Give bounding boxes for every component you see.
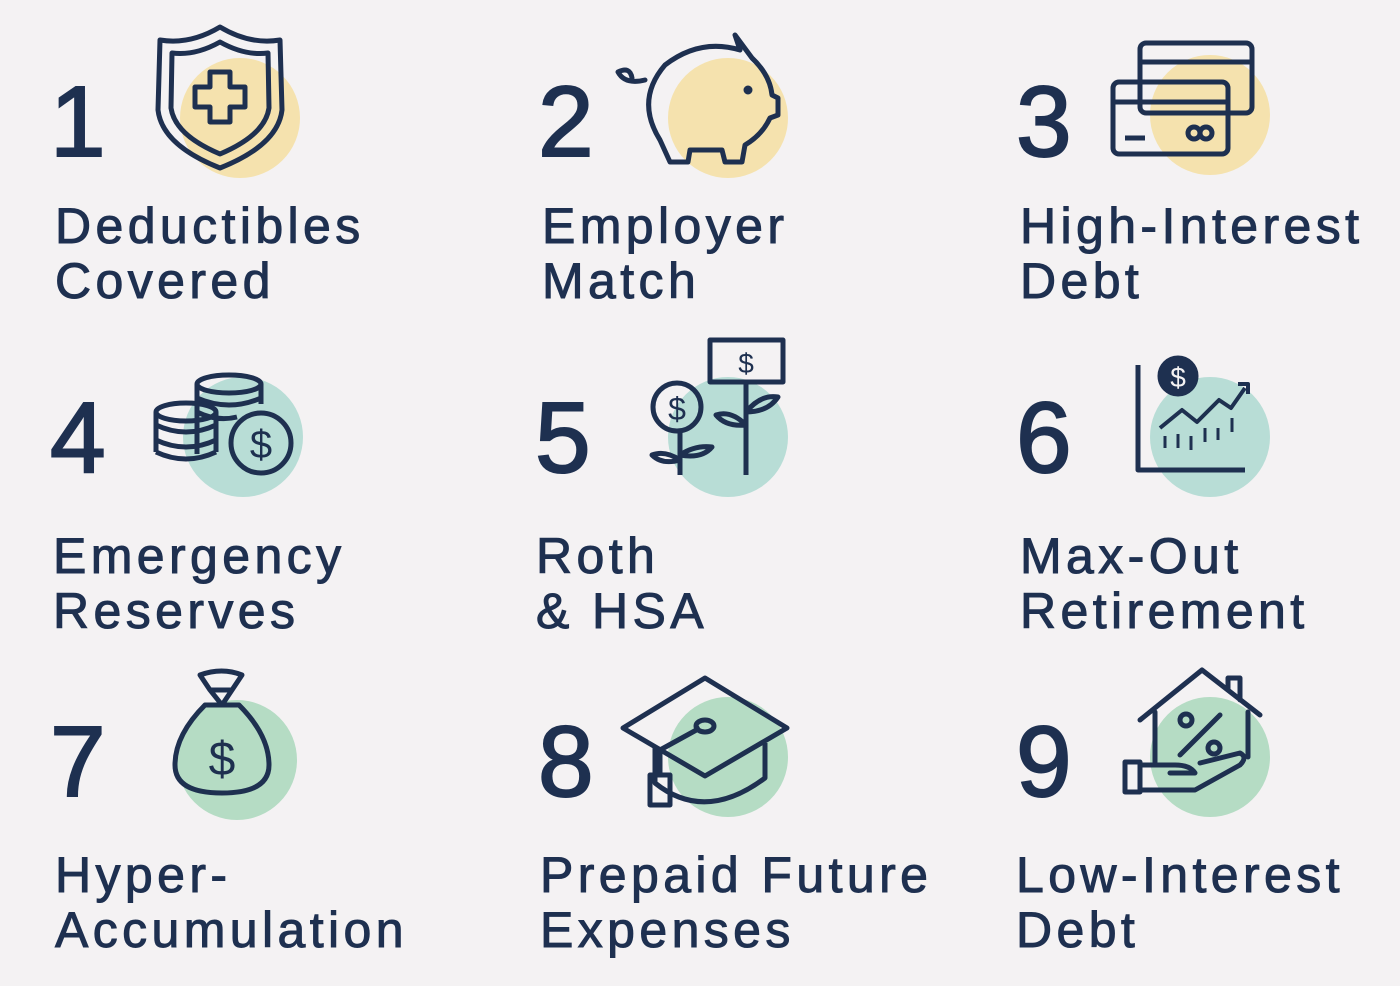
- text: $: [738, 348, 754, 379]
- icon: money plant: [650, 338, 788, 497]
- label: High-Interest Debt: High-Interest: [1020, 198, 1363, 254]
- icon: money bag: [172, 668, 297, 820]
- label: Max-Out Retirement: Max-Out: [1020, 528, 1242, 584]
- label: Employer Match: Employer: [542, 198, 788, 254]
- tile 4 number: 4: [50, 382, 106, 494]
- tile 8 number: 8: [538, 706, 594, 818]
- tile 1 number: 1: [50, 66, 106, 178]
- label: Max-Out Retirement: Retirement: [1020, 583, 1309, 639]
- label: Prepaid Future Expenses: Expenses: [540, 902, 795, 958]
- tile 2 number: 2: [538, 66, 594, 178]
- icon: piggy bank: [616, 32, 788, 178]
- label: Deductibles Covered: Deductibles: [55, 198, 365, 254]
- label: Deductibles Covered: [55, 198, 365, 309]
- label: Roth & HSA: [536, 528, 708, 639]
- label: Hyper-Accumulation: Accumulation: [55, 902, 408, 958]
- icon: coins: [154, 372, 303, 497]
- label: Roth & HSA: & HSA: [536, 583, 708, 639]
- label: Emergency Reserves: Emergency: [53, 528, 345, 584]
- label: Hyper-Accumulation: [54, 847, 408, 958]
- label: High-Interest Debt: [1020, 198, 1363, 309]
- tile 5 number: 5: [535, 382, 591, 494]
- label: Low-Interest Debt: [1016, 847, 1344, 958]
- label: High-Interest Debt: Debt: [1020, 253, 1143, 309]
- label: Max-Out Retirement: [1020, 528, 1309, 639]
- label: Deductibles Covered: Covered: [55, 253, 275, 309]
- text: $: [1170, 362, 1186, 393]
- tile 3 number: 3: [1016, 66, 1072, 178]
- label: Prepaid Future Expenses: Prepaid Future: [540, 847, 932, 903]
- text: $: [209, 733, 235, 786]
- tile 7 number: 7: [50, 706, 106, 818]
- label: Prepaid Future Expenses: [540, 847, 932, 958]
- label: Emergency Reserves: Reserves: [53, 583, 299, 639]
- icon: credit cards: [1110, 40, 1270, 175]
- label: Roth & HSA: Roth: [536, 528, 659, 584]
- icon: shield with cross: [156, 24, 300, 178]
- icon: house on hand: [1122, 667, 1270, 817]
- icon: graduation cap: [620, 676, 790, 817]
- label: Low-Interest Debt: Low-Interest: [1016, 847, 1344, 903]
- text: $: [668, 391, 686, 427]
- label: Hyper-Accumulation: Hyper-: [55, 847, 231, 903]
- label: Employer Match: [542, 198, 788, 309]
- label: Emergency Reserves: [53, 528, 345, 639]
- tile 6 number: 6: [1016, 382, 1072, 494]
- text: $: [250, 423, 272, 467]
- tile 9 number: 9: [1016, 706, 1072, 818]
- icon: growth chart: [1136, 356, 1270, 497]
- label: Low-Interest Debt: Debt: [1016, 902, 1139, 958]
- label: Employer Match: Match: [542, 253, 700, 309]
